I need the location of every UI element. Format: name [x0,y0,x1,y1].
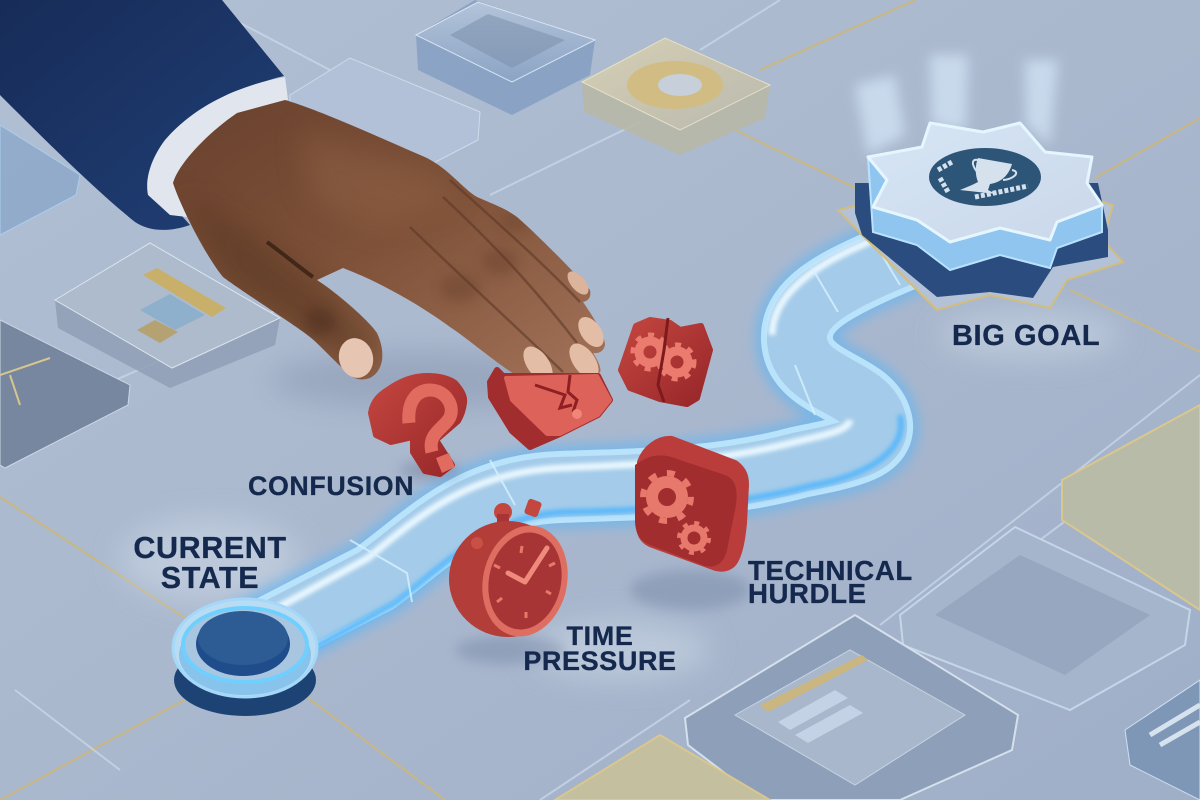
shadow of hand [270,352,570,408]
thumb web crease [267,242,313,277]
hand [173,100,609,387]
glass star side [868,157,1102,270]
glass block bottom centre with bars [685,615,1018,800]
glass block chart left [55,243,280,388]
dark star base [855,183,1108,298]
fingernails [334,334,378,382]
glass block gold chart [582,38,770,155]
label: current state: STATE [161,561,259,595]
glass star top [868,123,1102,242]
light rays [855,55,1058,155]
glass block wire left [0,320,130,468]
icon: laurels [938,162,1028,197]
current state node [173,599,317,716]
soft light halos behind labels [120,311,1120,680]
icon: question mark [371,376,464,478]
glass block bottom gold [555,735,770,800]
big goal star [838,55,1123,310]
finger shading [410,180,580,372]
sleeve and cuff [0,0,288,230]
icon: trophy [960,158,1012,194]
label: time pressure: PRESSURE [523,646,677,676]
icon: gears block technical hurdle [630,439,750,610]
glass block top centre [416,0,595,115]
glass block bottom right [1125,680,1200,800]
glass block far left [0,125,80,235]
label: current state: CURRENT [133,531,287,565]
label: technical hurdle: HURDLE [748,578,867,609]
label: time pressure: TIME [567,621,633,651]
icon: broken gears block [621,318,710,404]
icon: stopwatch [449,498,578,664]
label: big goal: BIG GOAL [952,320,1100,352]
icon: broken warning block [490,370,610,447]
label: confusion: CONFUSION [248,471,414,501]
glass block right lower [900,527,1190,710]
glass block right gold [1062,405,1200,610]
hand shading [198,146,526,372]
glowing path from current state to big goal [245,225,950,650]
glass block top middle-left [290,58,480,170]
gold base outline [838,170,1123,310]
trophy badge [929,148,1041,206]
label: technical hurdle: TECHNICAL [748,555,913,586]
